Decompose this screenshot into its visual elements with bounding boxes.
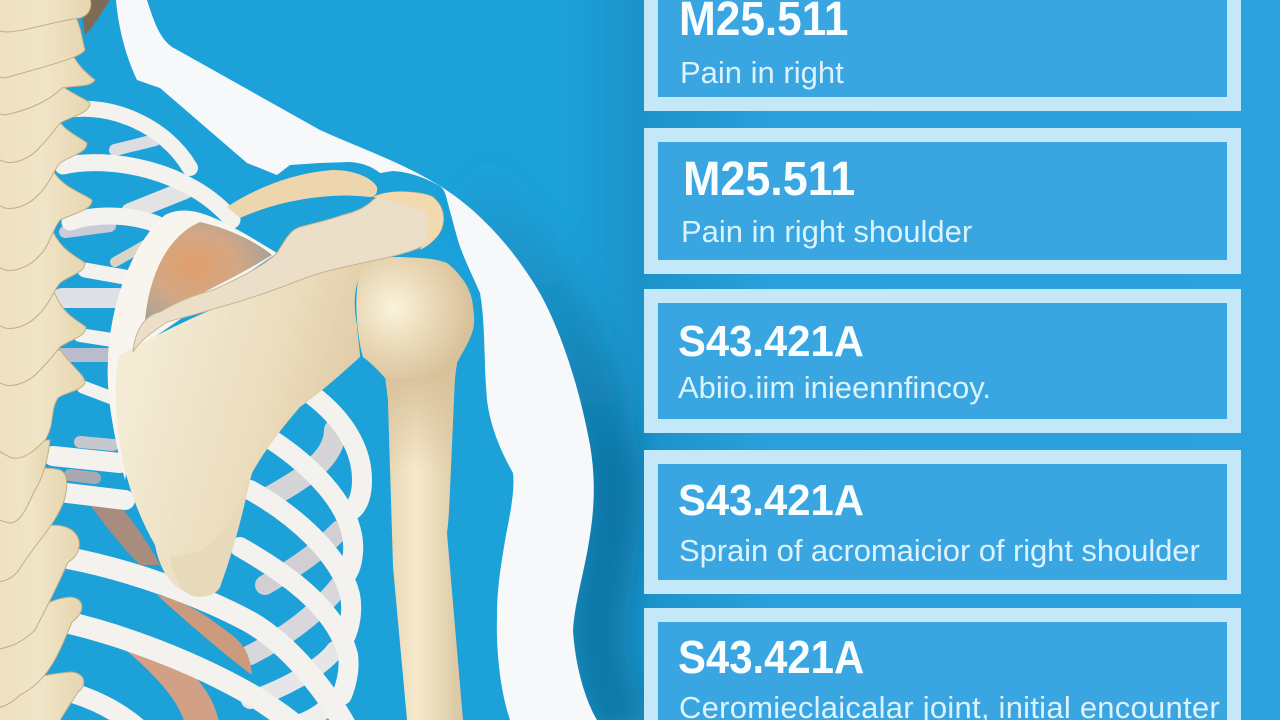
humeral head bbox=[356, 257, 474, 378]
scapula body bbox=[116, 262, 367, 597]
code: M25.511 bbox=[683, 153, 855, 206]
band shadow bbox=[470, 190, 625, 720]
scapular spine and acromion bbox=[133, 192, 444, 352]
scapula lower tip bbox=[170, 475, 250, 597]
back ribs bbox=[60, 140, 340, 720]
panel: code S43.421A acromioclavicular bbox=[644, 608, 1241, 720]
humerus shaft bbox=[385, 375, 463, 720]
panel: code S43.421A first bbox=[644, 289, 1241, 433]
code: S43.421A bbox=[678, 317, 864, 366]
description: Abiio.iim inieennfincoy. bbox=[678, 370, 991, 405]
panel: code M25.511 pain in right bbox=[644, 0, 1241, 111]
code: S43.421A bbox=[678, 631, 864, 683]
scapula outer rim bbox=[108, 211, 277, 480]
description: Pain in right shoulder bbox=[681, 214, 972, 249]
panel: code S43.421A sprain bbox=[644, 450, 1241, 594]
hair at top of spine bbox=[80, 0, 110, 35]
code: S43.421A bbox=[678, 476, 864, 525]
muscle bbox=[90, 505, 252, 720]
description: Pain in right bbox=[680, 55, 844, 90]
description: Sprain of acromaicior of right shoulder bbox=[679, 533, 1200, 568]
panel: code M25.511 pain in right shoulder bbox=[644, 128, 1241, 274]
clavicle bbox=[227, 170, 377, 218]
humerus neck shading bbox=[385, 375, 455, 490]
scapula and humerus bbox=[108, 191, 474, 720]
ribs bbox=[53, 109, 362, 720]
acromion rim bbox=[373, 191, 443, 250]
front ribs bbox=[53, 109, 362, 720]
soft tissue band: shoulder outline bbox=[116, 0, 597, 720]
orange highlighted area bbox=[145, 222, 272, 320]
spine bbox=[0, 0, 95, 720]
